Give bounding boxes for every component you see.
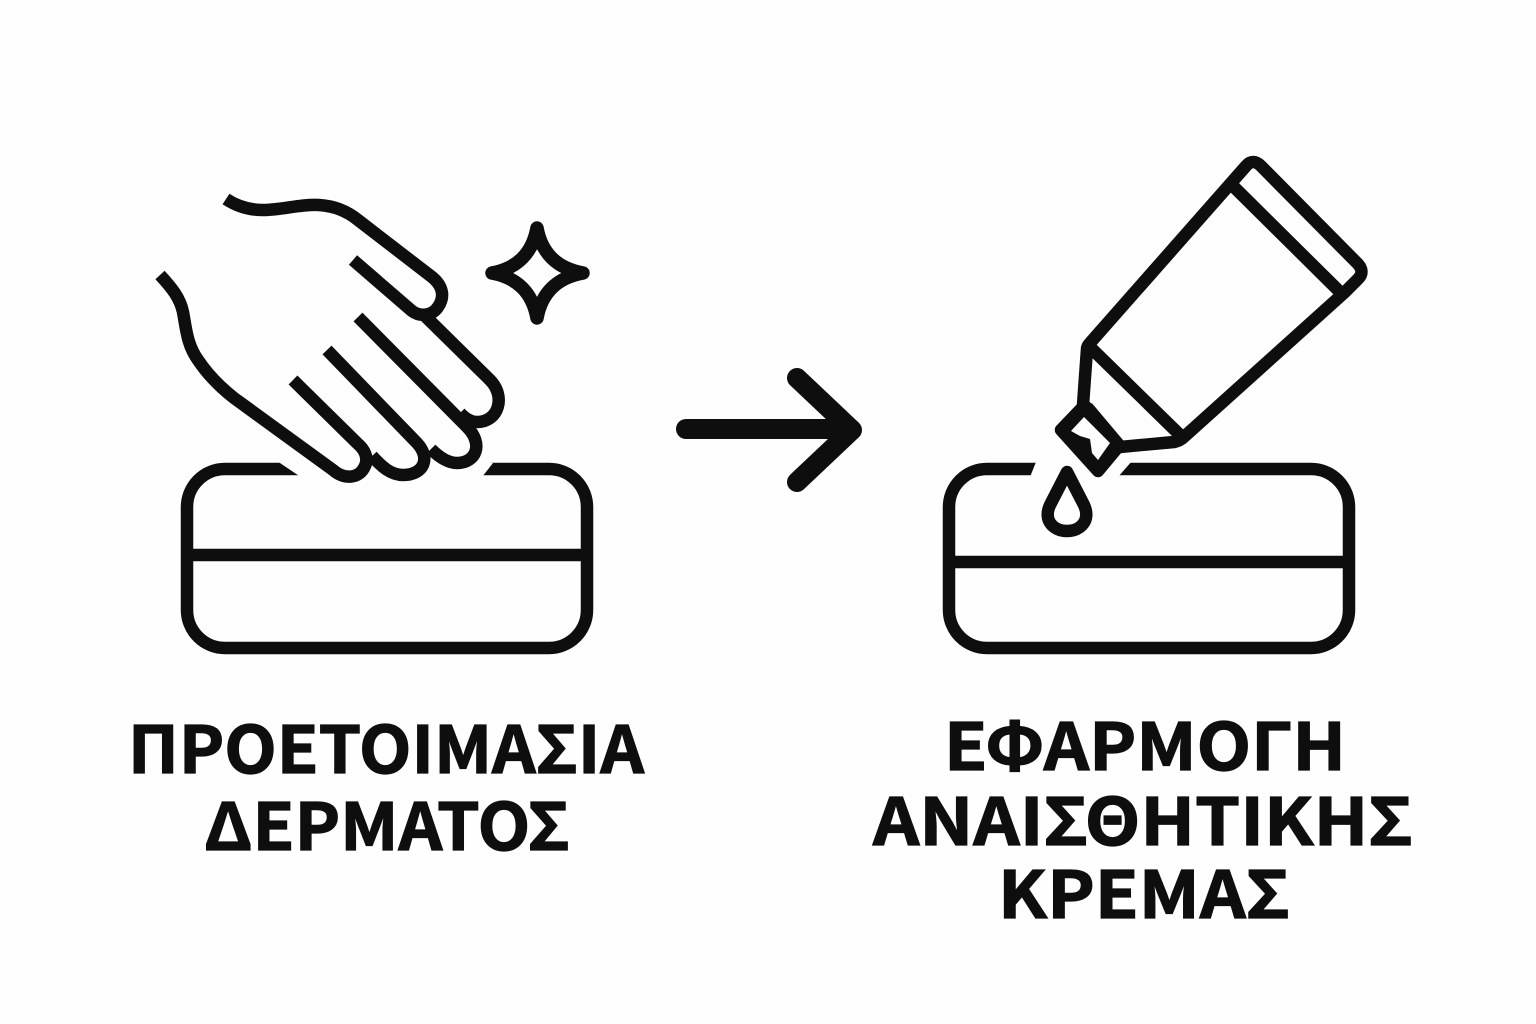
- heading: applying anesthetic cream: ΑΝΑΙΣΘΗΤΙΚΗΣ: [872, 770, 1413, 864]
- icon: cream tube: [1061, 162, 1362, 471]
- panel: skin preparation: [160, 199, 587, 648]
- heading: applying anesthetic cream: [872, 695, 1413, 937]
- heading: applying anesthetic cream: ΚΡΕΜΑΣ: [998, 843, 1290, 937]
- icon: skin block with opening: [949, 461, 1349, 648]
- panel: applying anesthetic cream: [949, 162, 1362, 648]
- heading: applying anesthetic cream: ΕΦΑΡΜΟΓΗ: [944, 695, 1346, 789]
- heading: skin preparation: ΔΕΡΜΑΤΟΣ: [204, 775, 570, 869]
- arrow: [686, 378, 852, 482]
- icon: cream drop: [1048, 472, 1086, 531]
- icon: skin block: [187, 461, 587, 648]
- icon: sparkle: [492, 228, 583, 318]
- heading: skin preparation: ΠΡΟΕΤΟΙΜΑΣΙΑ: [128, 698, 644, 792]
- icon: hand wiping skin: [160, 199, 499, 477]
- heading: skin preparation: [128, 698, 644, 869]
